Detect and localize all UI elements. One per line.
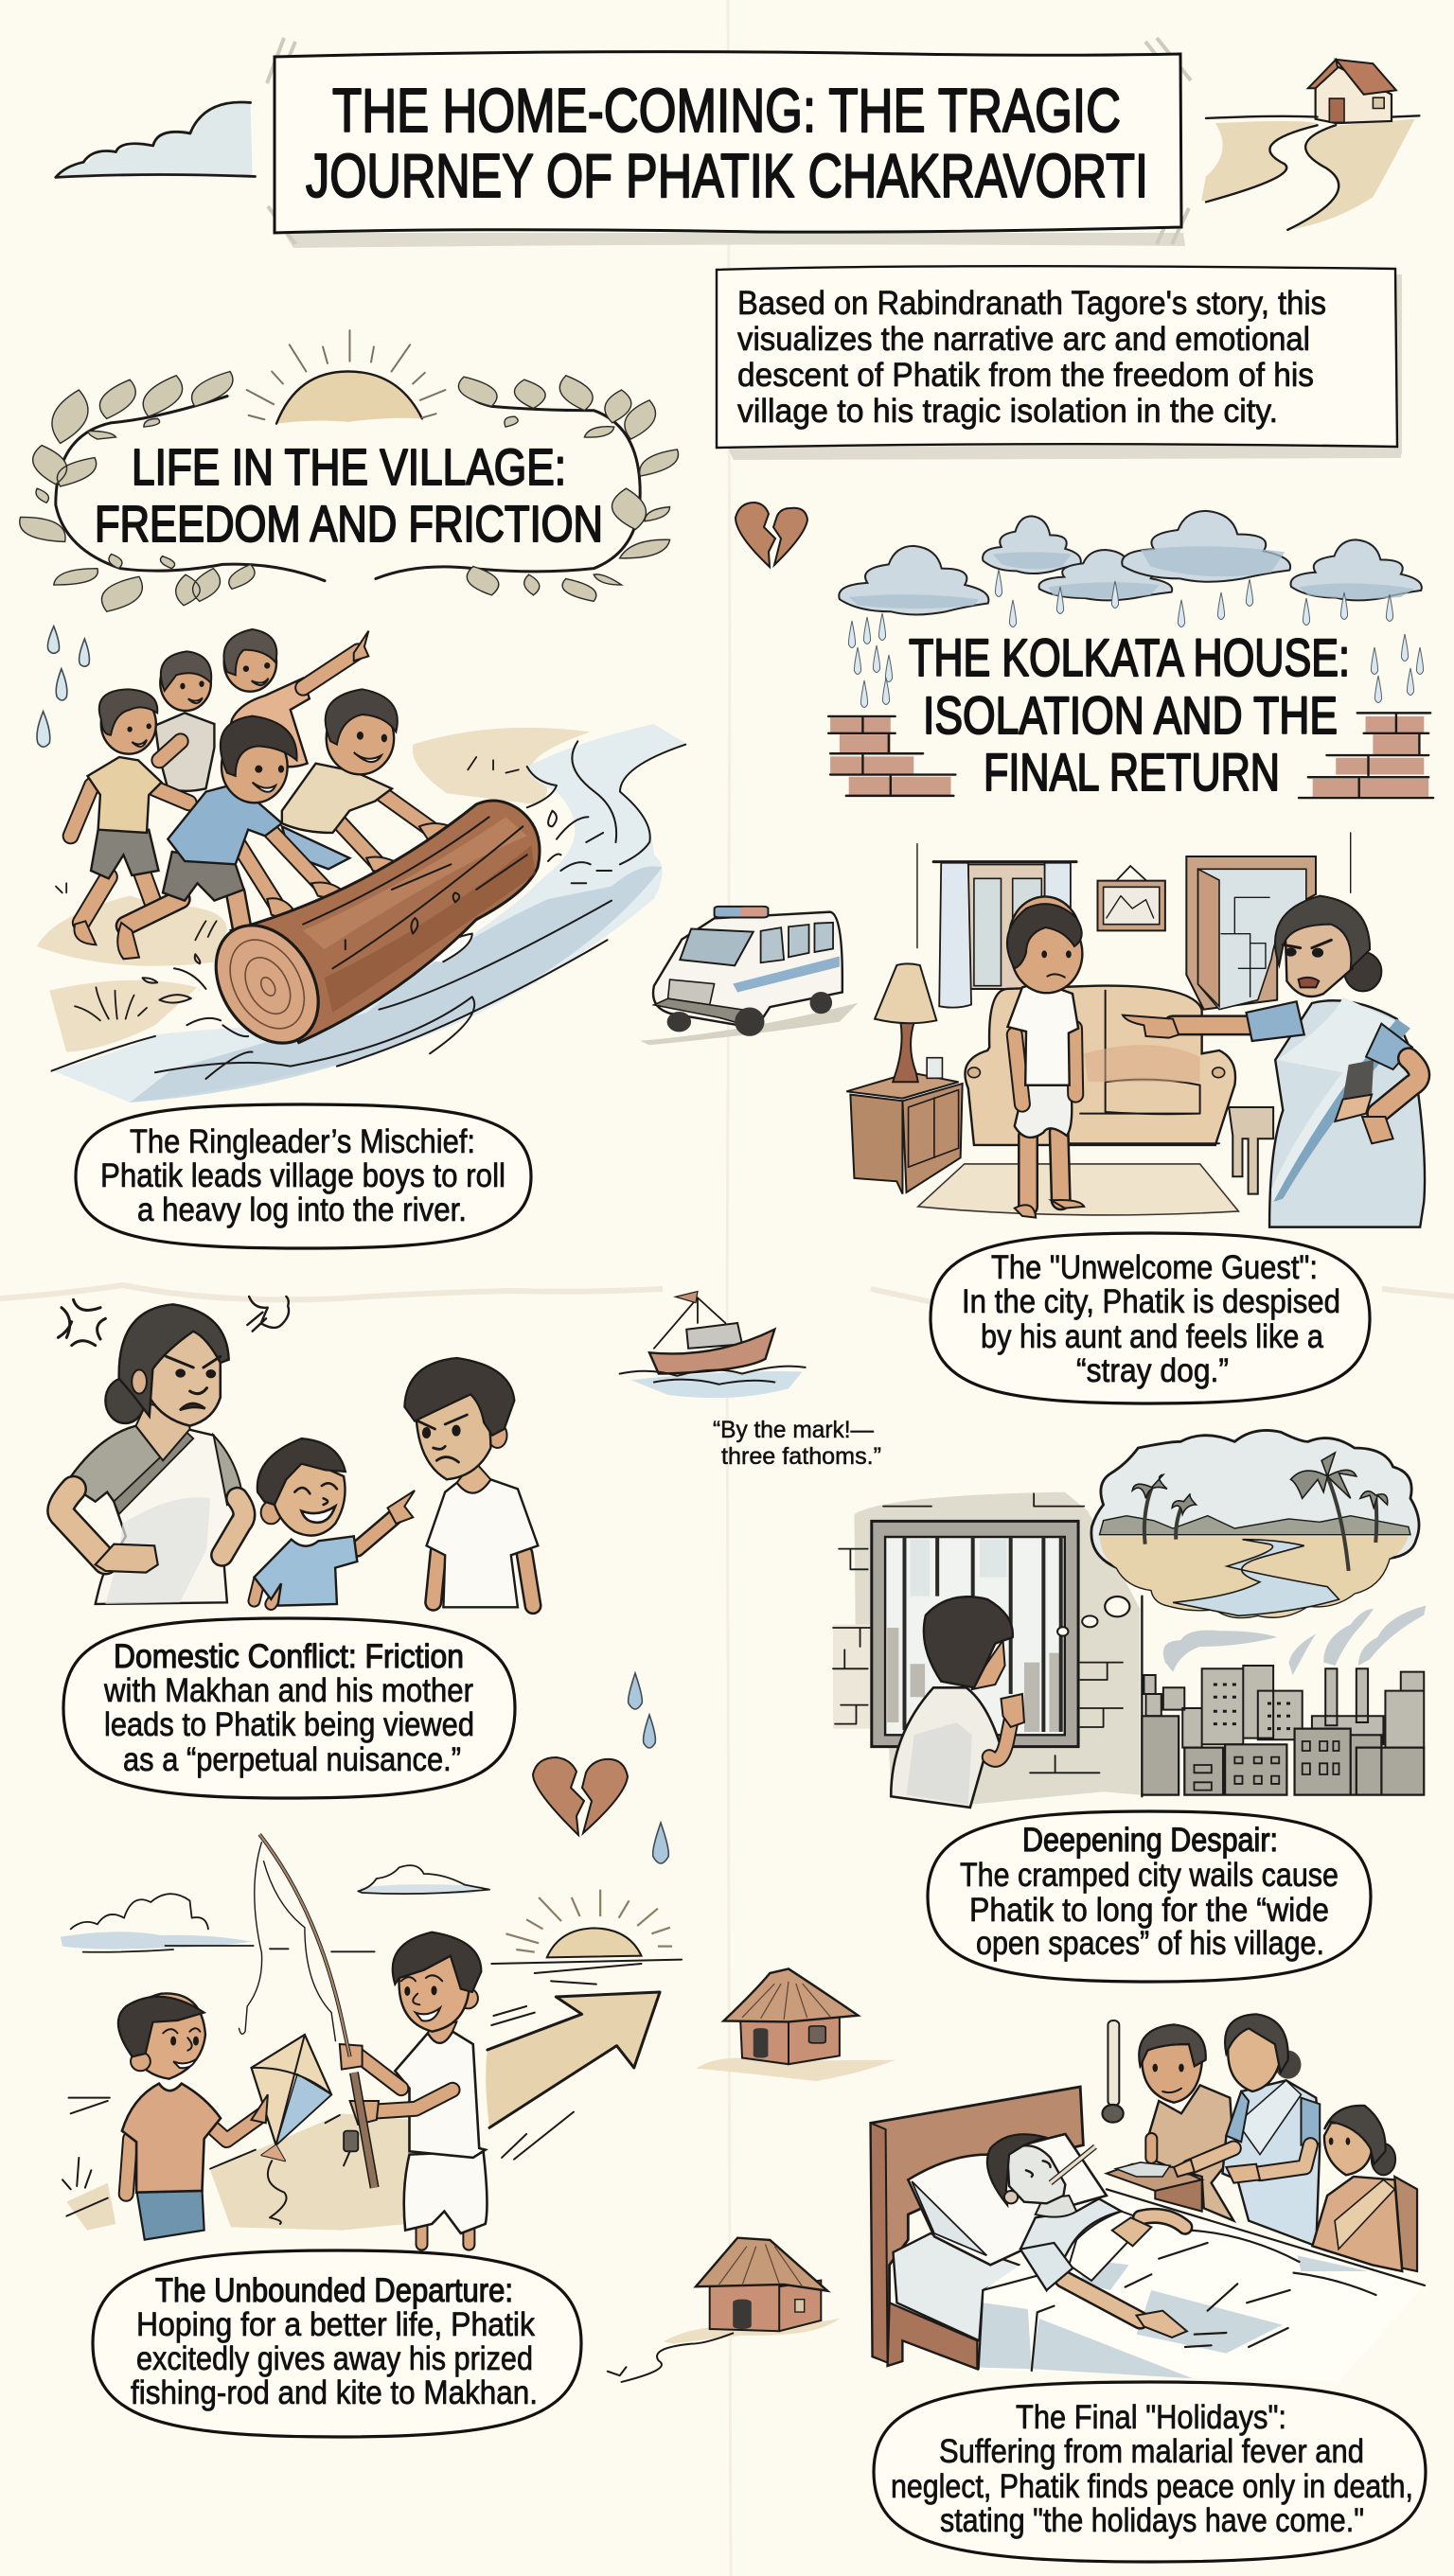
quote: by the mark: three fathoms.” bbox=[721, 1443, 881, 1470]
boy on the left walking bbox=[71, 689, 189, 944]
speech bubble: deepening despair: The cramped city wails cause bbox=[960, 1857, 1339, 1894]
boy from behind bbox=[891, 1597, 1024, 1808]
speech bubble: deepening despair bbox=[928, 1811, 1371, 1982]
speech bubble: the unwelcome guest: by his aunt and feels like a bbox=[981, 1318, 1323, 1355]
speech bubble: the final holidays: Suffering from malarial fever and bbox=[939, 2433, 1364, 2470]
speech bubble: deepening despair: Deepening Despair: bbox=[1022, 1822, 1278, 1859]
icon: broken heart lower bbox=[533, 1757, 628, 1835]
icon: cloud beside title bbox=[56, 102, 256, 177]
speech bubble: the unwelcome guest: “stray dog.” bbox=[1076, 1352, 1229, 1389]
title text bbox=[306, 76, 1148, 210]
rug bbox=[918, 1164, 1238, 1215]
illustration: village boys rolling a log into the river bbox=[37, 626, 687, 1103]
heading: the Kolkata house with bricks: FINAL RETURN bbox=[984, 742, 1280, 802]
illustration: angry mother with Makhan and Phatik bbox=[58, 1297, 538, 1607]
anger marks bbox=[58, 1297, 289, 1346]
speech bubble: the unbounded departure bbox=[93, 2250, 581, 2437]
speech bubble: the ringleader's mischief: The Ringleader’s Mischief: bbox=[130, 1123, 475, 1160]
illustration: boy at barred window with thought cloud of the village and factory city bbox=[833, 1430, 1426, 1808]
heading: life in the village with vine frame: FREEDOM AND FRICTION bbox=[95, 496, 603, 553]
boy Phatik standing bbox=[1007, 896, 1084, 1218]
icon: rain clouds bbox=[839, 511, 1422, 614]
speech bubble: domestic conflict: with Makhan and his mother bbox=[103, 1672, 473, 1709]
thought cloud: village memory bbox=[1057, 1430, 1419, 1636]
icon: police van bbox=[640, 907, 858, 1045]
kite bbox=[252, 2035, 331, 2224]
heading: life in the village with vine frame bbox=[20, 371, 679, 611]
framed picture bbox=[1097, 866, 1165, 930]
heading: life in the village with vine frame: LIFE IN THE VILLAGE: bbox=[132, 439, 566, 496]
boy pointing upward bbox=[223, 629, 368, 767]
aunt pointing bbox=[1123, 896, 1425, 1227]
speech bubble: the ringleader's mischief: a heavy log into the river. bbox=[137, 1191, 467, 1228]
speech bubble: the final holidays: The Final "Holidays": bbox=[1016, 2399, 1286, 2436]
intro text box: descent of Phatik from the freedom of his bbox=[737, 357, 1314, 394]
icon: broken heart upper bbox=[736, 503, 807, 567]
seated girl bbox=[1312, 2106, 1417, 2271]
speech bubble: the ringleader's mischief: Phatik leads village boys to roll bbox=[100, 1157, 505, 1194]
right boy with fishing rod bbox=[340, 1932, 487, 2245]
speech bubble: domestic conflict: as a “perpetual nuisance.” bbox=[123, 1741, 461, 1778]
quote: by the mark: “By the mark!— bbox=[713, 1417, 874, 1443]
icon: thatched hut lower with path bbox=[608, 2238, 840, 2382]
heading: the Kolkata house with bricks: ISOLATION AND THE bbox=[923, 685, 1338, 745]
armchair sofa bbox=[965, 986, 1235, 1145]
side table with lamp bbox=[846, 963, 963, 1194]
icon: rising sun bbox=[247, 330, 445, 424]
factory city skyline bbox=[1142, 1597, 1426, 1796]
boy behind bbox=[155, 651, 214, 791]
brick wall wash bbox=[833, 1492, 1140, 1805]
vine wreath bbox=[20, 371, 679, 611]
speech bubble: domestic conflict bbox=[63, 1618, 515, 1798]
speech bubble: the final holidays bbox=[874, 2382, 1426, 2562]
intro text box bbox=[717, 266, 1402, 460]
boy on the right pushing bbox=[282, 689, 451, 873]
quote: by the mark bbox=[713, 1417, 881, 1470]
intro text box: village to his tragic isolation in the city. bbox=[737, 393, 1278, 430]
speech bubble: deepening despair: Phatik to long for the “wide bbox=[969, 1892, 1329, 1929]
window frame and bars bbox=[872, 1521, 1078, 1747]
worried man bbox=[1139, 2024, 1233, 2221]
speech bubble: the unbounded departure: Hoping for a better life, Phatik bbox=[136, 2306, 535, 2343]
stool bbox=[1229, 1107, 1273, 1194]
speech bubble: the final holidays: stating "the holidays have come." bbox=[940, 2502, 1364, 2539]
brick walls bbox=[828, 713, 1433, 798]
table with book bbox=[1107, 2162, 1202, 2212]
speech bubble: the ringleader's mischief bbox=[76, 1104, 531, 1248]
mother bbox=[61, 1304, 244, 1604]
room wall lines bbox=[917, 833, 1351, 948]
window with curtains bbox=[933, 862, 1076, 1008]
bed with patient bbox=[871, 2087, 1425, 2382]
illustration: Phatik gives fishing rod and kite to Makhan bbox=[61, 1834, 682, 2245]
speech bubble: the unwelcome guest: In the city, Phatik is despised bbox=[962, 1283, 1340, 1320]
grass tufts and raindrops bbox=[37, 626, 519, 1020]
icon: house and winding road bbox=[1201, 60, 1419, 230]
speech bubble: domestic conflict: Domestic Conflict: Friction bbox=[114, 1638, 464, 1675]
illustration: family around Phatik's sickbed bbox=[871, 2014, 1425, 2382]
ground wash and rising arrow bbox=[62, 1992, 660, 2231]
speech bubble: the unbounded departure: fishing-rod and kite to Makhan. bbox=[131, 2374, 538, 2411]
intro text box: Based on Rabindranath Tagore's story, this bbox=[737, 285, 1326, 322]
icon: thatched hut upper bbox=[696, 1968, 895, 2081]
title text: THE HOME-COMING: THE TRAGIC bbox=[332, 76, 1121, 145]
speech bubble: the unwelcome guest: The "Unwelcome Guest": bbox=[991, 1249, 1318, 1286]
river bbox=[52, 724, 687, 1103]
boy Phatik frowning bbox=[404, 1358, 538, 1607]
boy in front pushing bbox=[117, 716, 341, 959]
icon: tear drops bbox=[629, 1673, 668, 1863]
intro text box: visualizes the narrative arc and emotional bbox=[737, 321, 1310, 358]
fishing rod bbox=[239, 1834, 375, 2188]
ground washes bbox=[37, 728, 591, 1052]
left boy with kite bbox=[118, 1993, 261, 2240]
speech bubble: the unbounded departure: excitedly gives away his prized bbox=[136, 2340, 533, 2377]
thermometer bbox=[1103, 2020, 1124, 2123]
little brother Makhan bbox=[254, 1438, 415, 1606]
illustration: aunt scolding Phatik in the Kolkata living room bbox=[846, 833, 1425, 1227]
icon: small boat bbox=[620, 1292, 806, 1398]
heading: the Kolkata house with bricks bbox=[828, 627, 1433, 802]
speech bubble: the unwelcome guest bbox=[931, 1233, 1370, 1403]
speech bubble: domestic conflict: leads to Phatik being viewed bbox=[104, 1706, 474, 1743]
speech bubble: the unbounded departure: The Unbounded Departure: bbox=[155, 2272, 513, 2309]
clouds and sun background bbox=[61, 1865, 682, 1985]
doorway bbox=[1186, 856, 1316, 1010]
rain drops bbox=[848, 570, 1424, 708]
title banner bbox=[267, 38, 1191, 248]
wooden log bbox=[198, 801, 540, 1052]
title text: JOURNEY OF PHATIK CHAKRAVORTI bbox=[306, 141, 1148, 210]
worried woman in blue sari bbox=[1174, 2014, 1320, 2246]
speech bubble: deepening despair: open spaces” of his village. bbox=[976, 1925, 1324, 1962]
